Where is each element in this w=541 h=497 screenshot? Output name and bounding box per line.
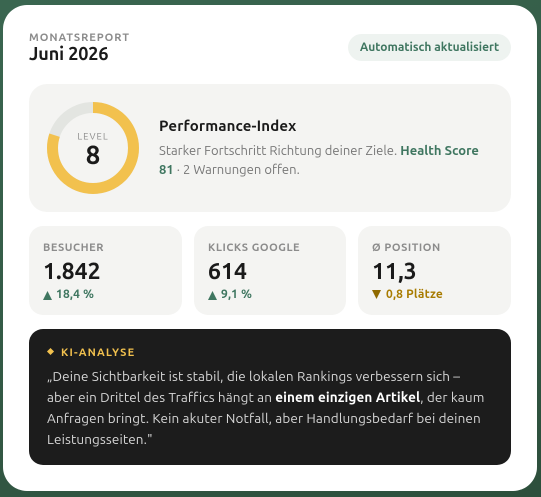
performance description: 81 · 2 Warnungen offen. [159,163,300,177]
performance heading: Performance-Index [159,117,296,134]
value: 11,3 [372,259,417,284]
quote text [47,368,484,447]
label: Ø POSITION [372,242,441,254]
donut chart: level 8: 8 [86,140,100,169]
performance description: Starker Fortschritt Richtung deiner Ziele. Health Score [159,144,479,158]
label: BESUCHER [43,242,104,254]
panel: performance index [29,84,511,212]
quote text: Anfragen bringt. Kein akuter Notfall, aber Handlungsbedarf bei deinen [47,410,481,426]
status pill: Automatisch aktualisiert [360,41,499,54]
quote text: „Deine Sichtbarkeit ist stabil, die lokalen Rankings verbessern sich – [47,368,460,384]
value: 1.842 [43,259,101,284]
ki heading: KI-ANALYSE [61,347,135,359]
quote text: aber ein Drittel des Traffics hängt an einem einzigen Artikel, der kaum [47,389,484,405]
icon: diamond [46,347,54,355]
label: KLICKS GOOGLE [208,242,300,254]
header eyebrow: MONATSREPORT [29,32,130,44]
panel: klicks google [194,226,346,315]
icon: down triangle [372,290,381,299]
icon: up triangle [208,291,217,300]
delta up: 18,4 % [56,288,94,301]
panel: position [358,226,511,315]
delta up: 9,1 % [221,288,252,301]
performance description [159,144,479,177]
status pill [348,34,511,61]
value: 614 [208,259,247,284]
donut chart: level 8: LEVEL [77,130,109,142]
header title: Juni 2026 [29,44,108,64]
donut chart: level 8 [47,102,139,194]
panel: ki-analyse [29,329,511,465]
panel: besucher [29,226,182,315]
delta down: 0,8 Plätze [386,288,443,301]
quote text: Leistungsseiten." [47,431,153,447]
icon: up triangle [43,291,52,300]
